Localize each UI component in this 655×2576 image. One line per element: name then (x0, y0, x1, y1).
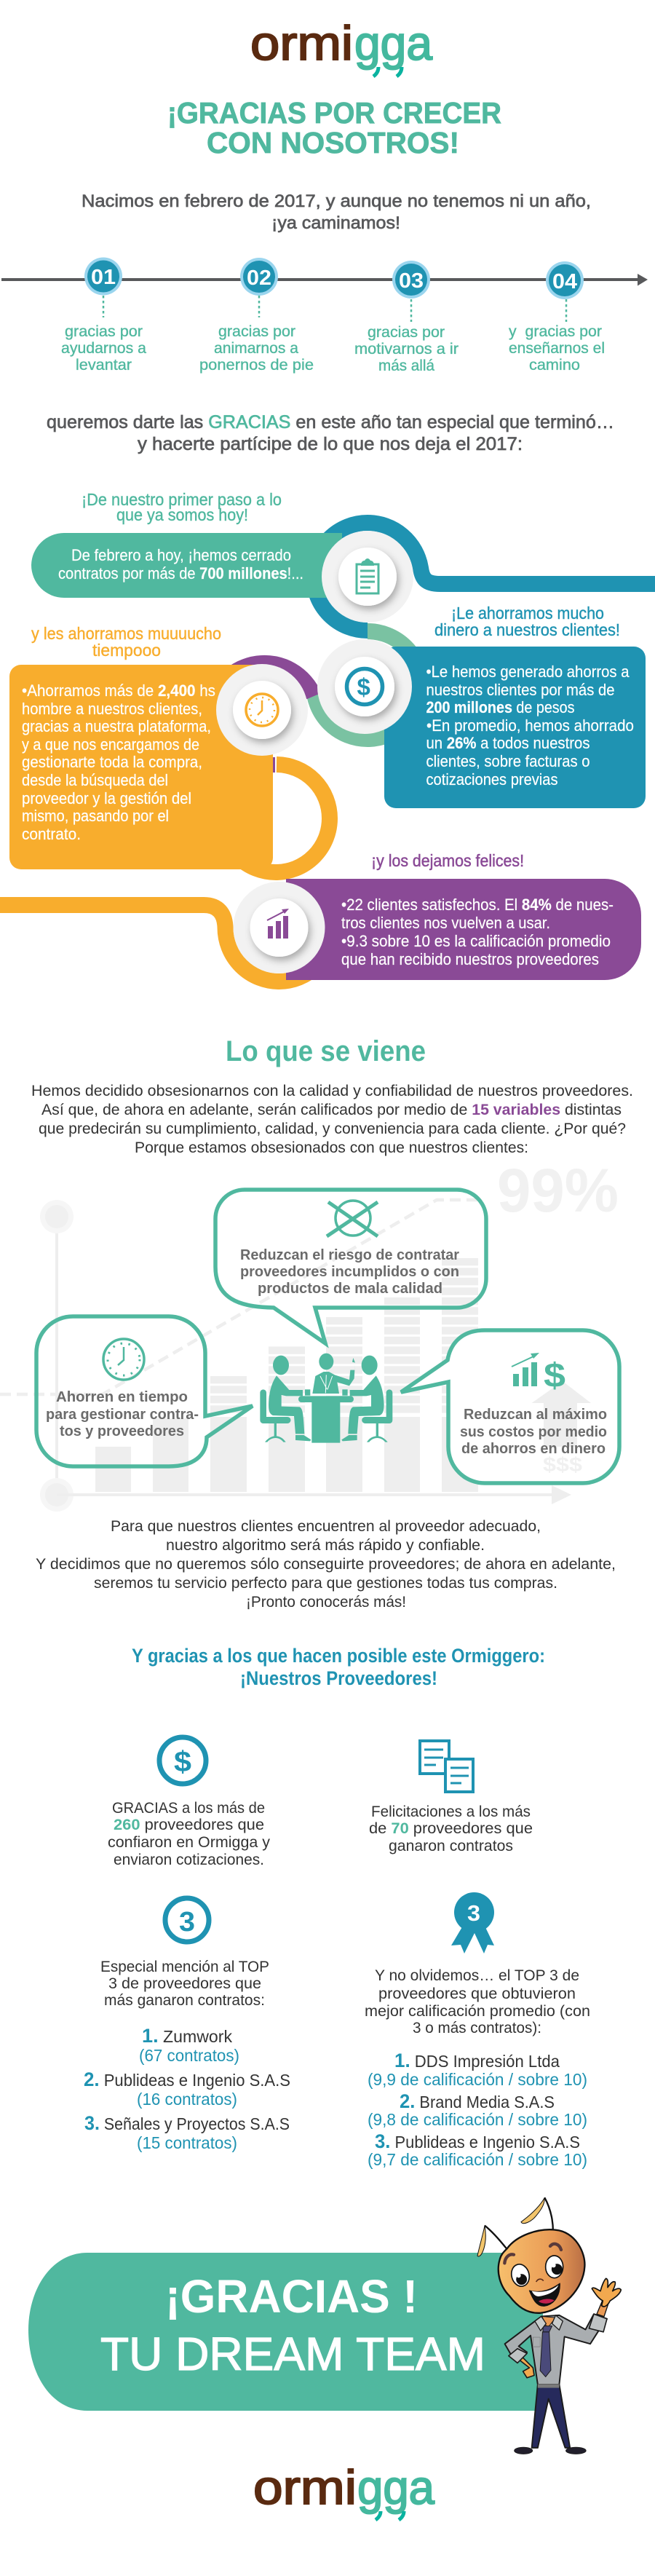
step 04: 04 (552, 270, 577, 293)
panel: time: contrato. (22, 825, 81, 843)
icon: dollar ring: $ (174, 1746, 191, 1778)
block: 70 suppliers: Felicitaciones a los más (371, 1803, 531, 1820)
heading: suppliers: Y gracias a los que hacen posible este Ormiggero: (132, 1645, 545, 1667)
step 01: levantar (76, 357, 132, 374)
background arrow (531, 1381, 591, 1447)
logo top: ormi (250, 16, 353, 70)
panel: time: gestionarte toda la compra, (22, 753, 202, 771)
icon: documents (420, 1741, 473, 1792)
panel: time: hombre a nuestros clientes, (22, 700, 202, 718)
icon: number three ring (165, 1898, 209, 1942)
block: top 3 by contracts (84, 1959, 290, 2152)
callout: risk: productos de mala calidad (258, 1281, 442, 1297)
step 03: motivarnos a ir (354, 341, 458, 357)
panel: time: gracias a nuestra plataforma, (22, 717, 211, 735)
heading: suppliers: ¡Nuestros Proveedores! (240, 1667, 437, 1689)
banner: TU DREAM TEAM (100, 2328, 485, 2380)
panel: money: clientes, sobre facturas o (426, 752, 590, 770)
icon: dollar ring (159, 1737, 206, 1784)
step 02: animarnos a (214, 340, 298, 357)
block: top 3 by contracts: 2. Publideas e Ingenio S.A.S (84, 2069, 290, 2090)
block: 70 suppliers: de 70 proveedores que (369, 1820, 533, 1837)
heading: savings: dinero a nuestros clientes! (434, 620, 620, 639)
table (298, 1396, 354, 1443)
step 01: 01 (91, 266, 116, 289)
block: top 3 by rating: 2. Brand Media S.A.S (400, 2090, 555, 2112)
timeline arrow (1, 274, 648, 285)
step 01 (61, 258, 146, 374)
block: top 3 by rating: 3 o más contratos): (413, 2020, 541, 2036)
step 03: gracias por (368, 324, 445, 341)
step 03: más allá (378, 357, 434, 374)
title (167, 96, 501, 159)
block: top 3 by rating: (9,7 de calificación / sobre 10) (368, 2150, 587, 2169)
person center (312, 1354, 355, 1394)
callout: time (36, 1316, 253, 1466)
block: 260 suppliers: GRACIAS a los más de (112, 1800, 265, 1817)
paragraph: algorithm: Y decidimos que no queremos sólo conseguirte proveedores; de ahora en adelante, (36, 1556, 616, 1573)
callout: time: tos y proveedores (60, 1423, 184, 1439)
callout: costs: Reduzcan al máximo (464, 1407, 607, 1423)
block: top 3 by contracts: (16 contratos) (137, 2090, 237, 2109)
paragraph: obsession: Porque estamos obsesionados con que nuestros clientes: (135, 1139, 528, 1156)
panel: money: nuestros clientes por más de (426, 681, 614, 699)
panel: money: •Le hemos generado ahorros a (426, 663, 630, 681)
heading: first step (82, 490, 282, 524)
panel: time: mismo, pasando por el (22, 807, 169, 825)
panel: happy clients: •9.3 sobre 10 es la calificación promedio (341, 932, 611, 950)
block: 70 suppliers (369, 1803, 533, 1854)
panel: time (9, 665, 275, 869)
step 01: ayudarnos a (61, 340, 146, 357)
callout: risk: proveedores incumplidos o con (240, 1264, 459, 1280)
heading: first step: que ya somos hoy! (116, 505, 248, 524)
panel: contracts: contratos por más de 700 millones!... (58, 564, 303, 582)
block: top 3 by contracts: (67 contratos) (139, 2046, 239, 2065)
panel: contracts (31, 533, 342, 598)
heading: time (31, 624, 221, 660)
panel: money: 200 millones de pesos (426, 698, 575, 716)
panel: time: •Ahorramos más de 2,400 hs (22, 681, 215, 700)
ant body (505, 2314, 607, 2454)
paragraph: algorithm: nuestro algoritmo será más rápido y confiable. (166, 1537, 485, 1554)
panel: contracts: De febrero a hoy, ¡hemos cerrado (71, 546, 291, 564)
intro text: ¡ya caminamos! (271, 213, 400, 233)
icon: crossed circle (327, 1201, 378, 1236)
background money sign: $$$ (543, 1453, 582, 1476)
step 02: 02 (247, 266, 271, 290)
banner: ¡GRACIAS ! (165, 2270, 418, 2323)
block: top 3 by rating: (9,8 de calificación / sobre 10) (368, 2110, 587, 2129)
ant head and hand (477, 2197, 621, 2317)
callout: costs (401, 1330, 619, 1483)
thanks statement (47, 412, 614, 454)
team at table (260, 1354, 392, 1443)
block: top 3 by contracts: más ganaron contratos: (104, 1992, 265, 2009)
logo top: gga (354, 16, 432, 70)
step 03: 03 (399, 269, 424, 293)
title: CON NOSOTROS! (207, 126, 459, 159)
thanks statement: y hacerte partícipe de lo que nos deja el 2017: (138, 434, 523, 454)
heading: happy clients: ¡y los dejamos felices! (371, 851, 524, 870)
callout: risk: Reduzcan el riesgo de contratar (240, 1247, 459, 1263)
paragraph: algorithm: Para que nuestros clientes encuentren al proveedor adecuado, (111, 1518, 541, 1535)
step 04 (509, 261, 605, 374)
block: top 3 by rating: Y no olvidemos… el TOP 3 de (375, 1967, 579, 1984)
callout: risk (215, 1190, 486, 1343)
title: ¡GRACIAS POR CRECER (167, 96, 501, 130)
timeline (1, 258, 648, 374)
panel: happy clients (286, 879, 641, 980)
panel: money: un 26% a todos nuestros (426, 734, 590, 752)
step 02: ponernos de pie (199, 357, 314, 374)
panel: happy clients: que han recibido nuestros proveedores (341, 950, 599, 968)
block: top 3 by rating: proveedores que obtuvieron (378, 1986, 576, 2002)
block: top 3 by rating: (9,9 de calificación / sobre 10) (368, 2070, 587, 2089)
paragraph: algorithm (36, 1518, 616, 1611)
callout: costs: de ahorros en dinero (461, 1441, 606, 1457)
panel: money: cotizaciones previas (426, 770, 557, 789)
heading: what's next: Lo que se viene (226, 1035, 426, 1067)
step 01: gracias por (65, 323, 143, 340)
step 02 (199, 258, 314, 374)
block: top 3 by contracts: Especial mención al TOP (100, 1959, 269, 1975)
callout: costs: sus costos por medio (460, 1424, 607, 1440)
block: 70 suppliers: ganaron contratos (389, 1838, 513, 1854)
intro text: Nacimos en febrero de 2017, y aunque no tenemos ni un año, (82, 191, 591, 211)
block: 260 suppliers: confiaron en Ormigga y (108, 1834, 271, 1851)
logo bottom: ormi (253, 2460, 357, 2514)
block: top 3 by contracts: 3 de proveedores que (108, 1975, 261, 1992)
background growth chart: 99% (497, 1156, 619, 1225)
icon: chart and dollar: $ (544, 1356, 565, 1394)
panel: happy clients: •22 clientes satisfechos. El 84% de nues- (341, 896, 614, 914)
block: top 3 by rating: 3. Publideas e Ingenio S.A.S (375, 2130, 580, 2152)
icon: chart and dollar (512, 1353, 565, 1394)
block: top 3 by rating: 1. DDS Impresión Ltda (394, 2050, 560, 2071)
icon: dollar (317, 639, 412, 734)
heading: savings: ¡Le ahorramos mucho (451, 604, 604, 623)
paragraph: obsession: que predecirán su cumplimiento, calidad, y conveniencia para cada cliente. ¿Por qué? (39, 1121, 626, 1137)
heading: time: y les ahorramos muuuucho (31, 624, 221, 643)
block: top 3 by rating: mejor calificación promedio (con (365, 2003, 590, 2020)
banner (28, 2253, 543, 2411)
block: 260 suppliers: enviaron cotizaciones. (114, 1852, 264, 1868)
icon: ribbon (451, 1892, 494, 1953)
block: top 3 by contracts: 3. Señales y Proyectos S.A.S (84, 2112, 290, 2134)
person right (341, 1356, 392, 1442)
panel: money: •En promedio, hemos ahorrado (426, 716, 634, 735)
block: 260 suppliers (108, 1800, 271, 1868)
panel: money (384, 647, 646, 808)
block: 260 suppliers: 260 proveedores que (114, 1817, 264, 1833)
step 04: camino (529, 357, 580, 374)
logo top (250, 16, 432, 76)
step 04: y gracias por (509, 323, 602, 340)
paragraph: obsession: Hemos decidido obsesionarnos con la calidad y confiabilidad de nuestros proveedores. (31, 1083, 633, 1099)
icon: dollar: $ (357, 673, 370, 700)
step 03 (354, 261, 458, 374)
heading: time: tiempooo (92, 641, 161, 660)
icon: number three ring: 3 (179, 1907, 195, 1937)
ant mascot (477, 2197, 621, 2454)
block: top 3 by rating (365, 1967, 590, 2169)
block: top 3 by contracts: (15 contratos) (137, 2133, 237, 2152)
logo bottom: gga (357, 2460, 434, 2514)
block: top 3 by contracts: 1. Zumwork (142, 2025, 232, 2047)
icon: ribbon: 3 (467, 1900, 480, 1926)
icon: clipboard (322, 531, 413, 623)
background growth chart (0, 1156, 619, 1512)
icon: clock (216, 664, 308, 756)
snake timeline ribbons (0, 523, 655, 981)
callout: time: para gestionar contra- (46, 1407, 199, 1423)
heading: first step: ¡De nuestro primer paso a lo (82, 490, 282, 509)
intro text (82, 191, 591, 233)
step 02: gracias por (218, 323, 295, 340)
panel: time: proveedor y la gestión del (22, 789, 191, 807)
panel: time: desde la búsqueda del (22, 771, 168, 789)
panel: time: y a que nos encargamos de (22, 735, 199, 754)
paragraph: obsession: Así que, de ahora en adelante, serán calificados por medio de 15 variables distintas (41, 1102, 622, 1118)
paragraph: algorithm: ¡Pronto conocerás más! (246, 1594, 406, 1611)
icon: clock outline (103, 1339, 144, 1380)
paragraph: algorithm: seremos tu servicio perfecto para que gestiones todas tus compras. (94, 1575, 557, 1592)
paragraph: obsession (31, 1083, 633, 1156)
person left (260, 1356, 311, 1442)
logo bottom (253, 2460, 434, 2520)
heading: suppliers (132, 1645, 545, 1689)
step 04: enseñarnos el (509, 340, 605, 357)
callout: time: Ahorren en tiempo (56, 1389, 188, 1405)
panel: happy clients: tros clientes nos vuelven a usar. (341, 914, 550, 932)
thanks statement: queremos darte las GRACIAS en este año tan especial que terminó… (47, 412, 614, 432)
icon: chart (233, 882, 325, 973)
heading: savings (434, 604, 620, 639)
